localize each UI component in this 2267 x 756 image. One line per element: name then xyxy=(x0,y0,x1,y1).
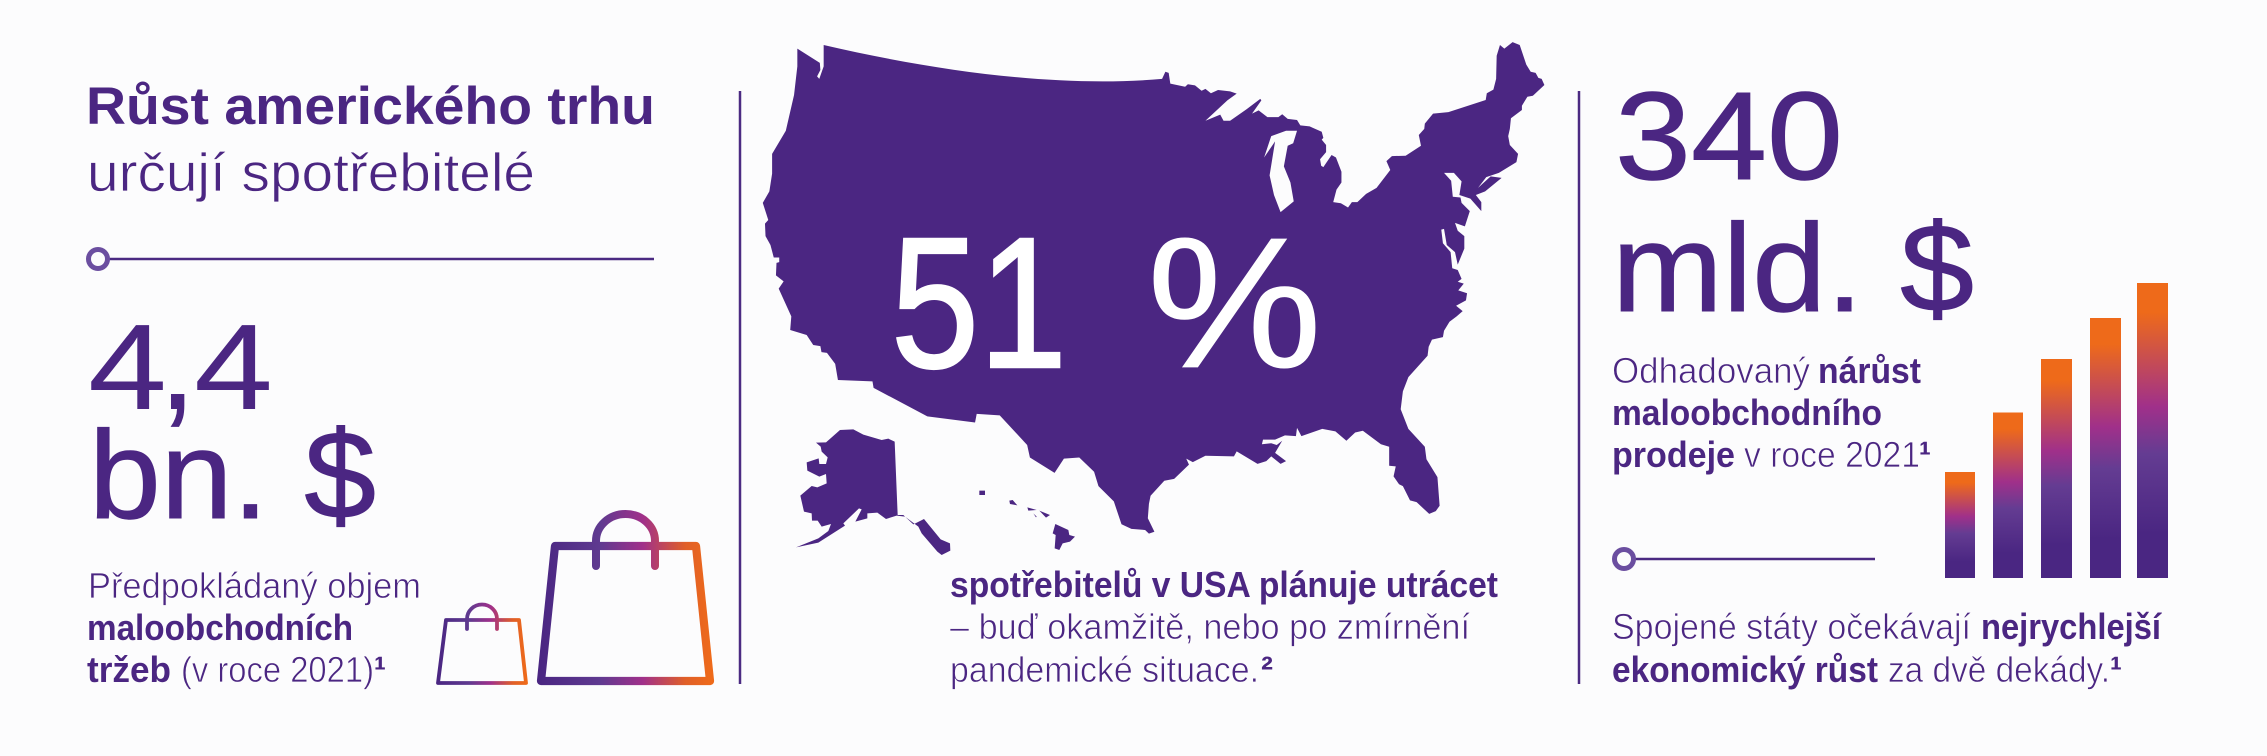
Alaska xyxy=(796,429,950,555)
text: retail sales forecast xyxy=(87,565,421,690)
text: US consumers spending: spotřebitelů v USA plánuje utrácet xyxy=(950,564,1498,605)
divider: left xyxy=(739,91,741,684)
text: retail growth estimate xyxy=(1612,350,1931,475)
text: fastest economic growth: ¹ xyxy=(2110,649,2122,690)
heading xyxy=(86,77,655,203)
icon: large shopping bag xyxy=(541,514,710,681)
text: retail sales forecast: (v roce 2021) xyxy=(181,649,374,690)
text: US consumers spending xyxy=(950,564,1498,690)
text: US consumers spending: – buď okamžitě, nebo po zmírnění xyxy=(950,606,1470,647)
divider: right xyxy=(1578,91,1580,684)
text: retail growth estimate: maloobchodního xyxy=(1612,392,1882,433)
statistic: 4,4 bn. $: bn. $ xyxy=(89,406,376,545)
statistic: 51 %: 51 xyxy=(891,200,1067,407)
bar chart: rising retail sales xyxy=(1945,283,2168,578)
text: US consumers spending: ² xyxy=(1261,649,1273,690)
statistic: 4,4 bn. $: 4 xyxy=(88,299,167,435)
statistic: 340 mld. $ xyxy=(1612,67,1974,338)
text: retail growth estimate: ¹ xyxy=(1919,434,1931,475)
timeline marker: right xyxy=(1614,550,1875,568)
text: fastest economic growth xyxy=(1612,606,2162,690)
contiguous states xyxy=(763,42,1544,534)
statistic: 340 mld. $: mld. $ xyxy=(1612,199,1974,338)
icon: small shopping bag xyxy=(438,605,526,683)
text: retail growth estimate: Odhadovaný xyxy=(1612,350,1810,391)
text: retail growth estimate: prodeje xyxy=(1612,434,1735,475)
timeline marker: left xyxy=(88,250,654,268)
text: retail growth estimate: v roce 2021 xyxy=(1744,434,1920,475)
statistic: 4,4 bn. $: 4 xyxy=(194,299,273,435)
statistic: 4,4 bn. $ xyxy=(88,282,376,545)
text: retail sales forecast: maloobchodních xyxy=(87,607,353,648)
heading: určují spotřebitelé xyxy=(87,143,535,203)
text: US consumers spending: pandemické situace. xyxy=(950,649,1259,690)
Hawaii xyxy=(979,491,1075,550)
statistic: 4,4 bn. $: , xyxy=(158,282,197,439)
text: fastest economic growth: Spojené státy očekávají xyxy=(1612,606,1971,647)
text: fastest economic growth: ekonomický růst xyxy=(1612,649,1878,690)
statistic: 340 mld. $: 340 xyxy=(1615,67,1843,206)
text: fastest economic growth: nejrychlejší xyxy=(1981,606,2162,647)
heading: Růst amerického trhu xyxy=(86,77,655,136)
statistic: 51 % xyxy=(891,200,1322,407)
text: retail growth estimate: nárůst xyxy=(1818,350,1921,391)
text: retail sales forecast: tržeb xyxy=(87,649,171,690)
text: fastest economic growth: za dvě dekády. xyxy=(1888,649,2110,690)
statistic: 51 %: % xyxy=(1147,200,1322,407)
text: retail sales forecast: ¹ xyxy=(374,649,386,690)
text: retail sales forecast: Předpokládaný objem xyxy=(88,565,421,606)
map: United States xyxy=(763,42,1544,555)
